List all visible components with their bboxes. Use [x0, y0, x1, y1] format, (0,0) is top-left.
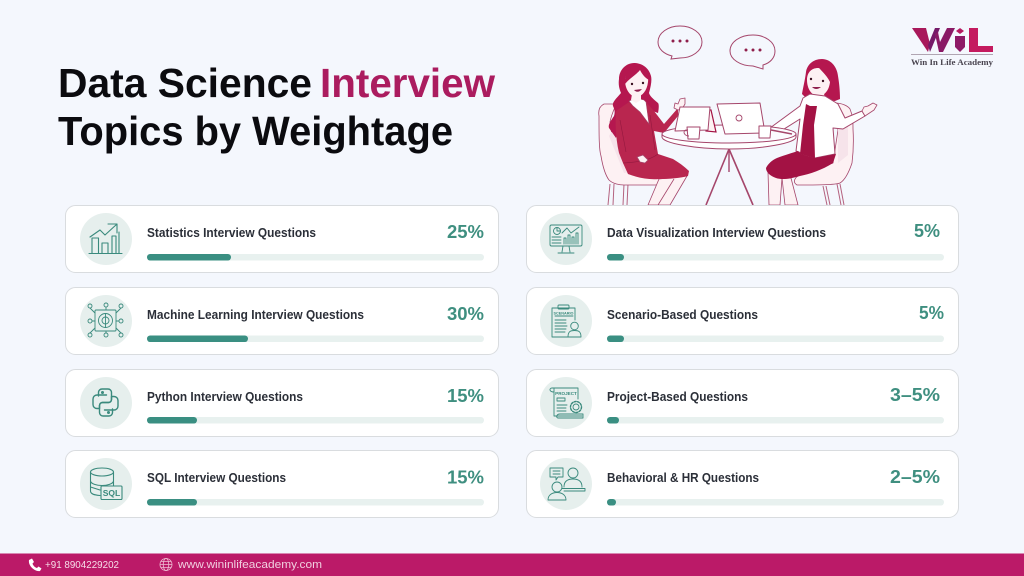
panel: SQL: 15% [447, 466, 484, 488]
progress bar 5% [607, 254, 944, 260]
panel: Scenario-Based: Scenario-Based Questions [607, 307, 758, 322]
hair [802, 59, 840, 101]
laptop [717, 103, 765, 134]
icon: data visualization monitor [540, 213, 592, 265]
tablet [675, 107, 716, 132]
icon: project scroll with gear: PROJECT [555, 391, 577, 396]
panel: Scenario-Based [526, 288, 958, 354]
left chair [599, 104, 662, 205]
right chair [794, 103, 853, 205]
panel: SQL: SQL Interview Questions [147, 470, 286, 485]
panel: Behavioral & HR: Behavioral & HR Questions [607, 470, 759, 485]
progress bar 30% [147, 336, 484, 342]
speech bubble right [730, 35, 775, 69]
icon: globe [160, 558, 172, 570]
right woman [766, 59, 877, 205]
legs [768, 172, 782, 205]
title: Topics by Weightage [58, 108, 453, 154]
legs [648, 176, 687, 205]
left woman [609, 63, 689, 205]
collar [629, 98, 649, 124]
panel: Project-Based [526, 370, 958, 436]
logo: Win In Life Academy [911, 28, 993, 67]
panel: Project-Based: 3–5% [890, 384, 940, 405]
icon: phone [29, 558, 42, 571]
table [662, 125, 796, 205]
panel: Machine Learning: Machine Learning Interview Questions [147, 307, 364, 322]
icon: python logo [80, 377, 132, 429]
progress bar 5% [607, 336, 944, 342]
speech bubble left [658, 26, 702, 59]
logo: Win In Life Academy: Win In Life Academy [911, 58, 993, 67]
panel: Behavioral & HR: 2–5% [890, 466, 940, 487]
panel: Data Visualization [526, 206, 958, 272]
panel: Scenario-Based: 5% [919, 302, 944, 323]
website: www.wininlifeacademy.com [177, 559, 322, 571]
panel: Python [66, 370, 498, 436]
panel: Statistics: Statistics Interview Questions [147, 225, 316, 240]
coffee cups [684, 126, 792, 139]
icon: machine learning chip [80, 295, 132, 347]
progress bar 15% [147, 417, 484, 424]
face [625, 68, 648, 97]
panel: Python: 15% [447, 385, 484, 406]
panel: Machine Learning [66, 288, 498, 354]
panel: Statistics: 25% [447, 221, 484, 242]
panel: Project-Based: Project-Based Questions [607, 389, 748, 404]
panel: Behavioral & HR [526, 450, 958, 518]
logo mark [912, 28, 993, 52]
panel: SQL [66, 450, 498, 518]
progress bar 25% [147, 254, 484, 260]
progress bar 2-5% [607, 499, 944, 506]
title [58, 60, 495, 154]
panel: Data Visualization: Data Visualization Interview Questions [607, 225, 826, 240]
suit and skirt [616, 102, 689, 179]
icon: project scroll with gear [540, 377, 592, 429]
icon: scenario clipboard: SCENARIO [554, 312, 574, 316]
icon: SQL database [80, 458, 132, 510]
progress bar 15% [147, 499, 484, 506]
white jacket [770, 94, 865, 158]
hair [609, 63, 659, 138]
phone number: +91 8904229202 [45, 559, 119, 571]
panel: Statistics [66, 206, 498, 272]
icon: SQL database: SQL [103, 488, 120, 498]
footer bar [0, 554, 1024, 576]
hands [674, 98, 685, 110]
dress [800, 104, 817, 158]
panel: Data Visualization: 5% [914, 220, 940, 241]
hand [862, 103, 877, 116]
panel: Machine Learning: 30% [447, 303, 484, 324]
progress bar 3-5% [607, 417, 944, 424]
panel: Python: Python Interview Questions [147, 389, 303, 404]
face [807, 68, 830, 96]
icon: statistics chart [80, 213, 132, 265]
title: Interview [320, 60, 495, 106]
title: Data Science [58, 60, 312, 106]
icon: behavioral interview people [540, 458, 592, 510]
illustration: two women talking at a table [599, 26, 877, 205]
icon: scenario clipboard [540, 295, 592, 347]
